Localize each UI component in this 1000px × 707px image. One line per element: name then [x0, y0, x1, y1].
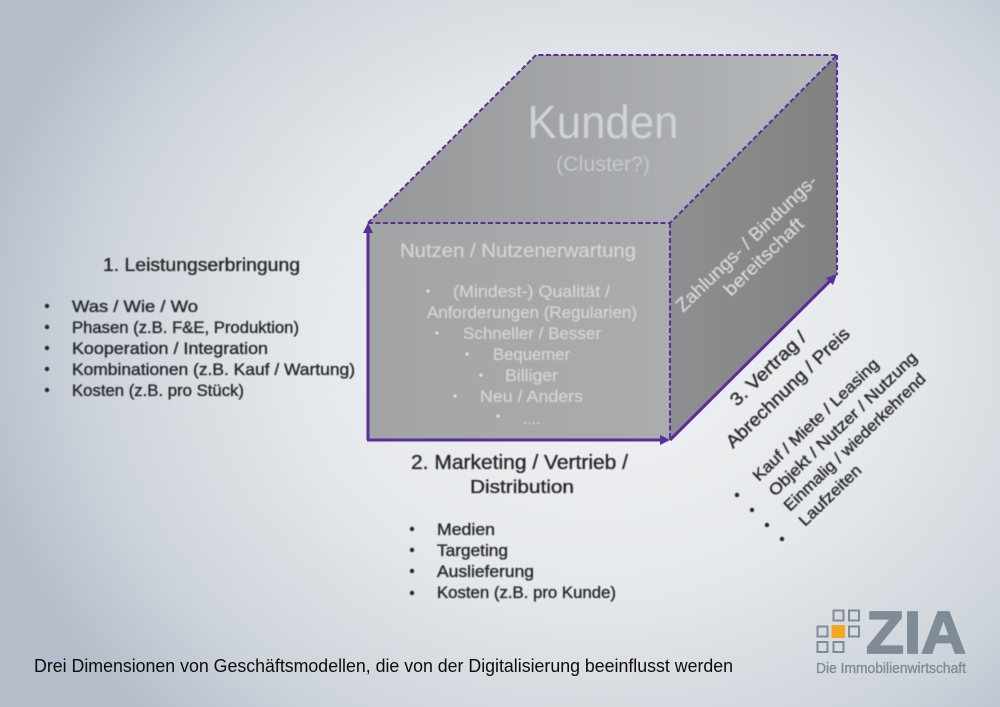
heading 3: Abrechnung / Preis	[722, 324, 854, 452]
list 1: Kooperation / Integration	[72, 340, 268, 358]
cube top face: Kunden	[368, 55, 837, 223]
logo: ZIA	[816, 600, 966, 677]
list 2: Targeting	[437, 542, 508, 560]
list 2: Medien	[437, 521, 495, 539]
cube diagram	[363, 55, 837, 445]
logo tagline: Die Immobilienwirtschaft	[816, 661, 966, 677]
list 3: Kauf / Miete / Leasing	[750, 356, 883, 485]
arrow: Marketing axis	[367, 435, 670, 445]
caption: Drei Dimensionen von Geschäftsmodellen, die von der Digitalisierung beeinflusst werden	[34, 656, 733, 676]
section 3: Vertrag	[722, 324, 929, 541]
cube top face: Kunden: Kunden	[528, 96, 678, 148]
heading 2: 2. Marketing / Vertrieb /	[411, 452, 628, 474]
cube front face: Nutzen: Bequemer	[493, 345, 570, 364]
list 3: Objekt / Nutzer / Nutzung	[766, 349, 921, 500]
list 1: Kombinationen (z.B. Kauf / Wartung)	[72, 361, 355, 379]
logo wordmark: ZIA	[866, 600, 966, 666]
heading 2: Distribution	[470, 476, 574, 497]
list 3	[735, 349, 929, 541]
heading 1: 1. Leistungserbringung	[103, 255, 300, 275]
cube side face: Zahlungsbereitschaft	[670, 55, 837, 440]
cube front face: Nutzen: Anforderungen (Regularien)	[427, 303, 637, 322]
arrow: Leistungserbringung axis	[363, 223, 373, 440]
cube side face: Zahlungsbereitschaft: Zahlungs- / Bindungs-	[671, 170, 821, 316]
dashed purple cube edges	[368, 55, 837, 440]
list 1: Kosten (z.B. pro Stück)	[72, 382, 244, 400]
list 2	[410, 521, 616, 602]
list 2: Kosten (z.B. pro Kunde)	[437, 584, 616, 602]
cube front face: Nutzen: Neu / Anders	[480, 387, 583, 406]
cube front face: Nutzen: Nutzen / Nutzenerwartung	[400, 241, 636, 262]
list 3: Einmalig / wiederkehrend	[781, 371, 929, 515]
section 1: Leistungserbringung	[45, 255, 355, 400]
heading 2	[411, 452, 628, 497]
arrow: Vertrag axis	[670, 274, 837, 440]
cube front face: Nutzen: ....	[523, 411, 540, 427]
cube front face: Nutzen: (Mindest-) Qualität /	[453, 282, 610, 301]
cube front face: Nutzen: Billiger	[505, 366, 558, 385]
list 1: Was / Wie / Wo	[72, 298, 198, 316]
list 1	[45, 298, 355, 400]
logo icon: squares	[818, 610, 859, 652]
cube front face: Nutzen	[368, 223, 670, 440]
heading 3: 3. Vertrag /	[726, 327, 810, 410]
list 2: Auslieferung	[437, 563, 534, 581]
list 1: Phasen (z.B. F&E, Produktion)	[72, 319, 299, 337]
cube front face: Nutzen: Schneller / Besser	[463, 324, 601, 343]
cube top face: Kunden: (Cluster?)	[556, 153, 650, 176]
cube side face: Zahlungsbereitschaft: bereitschaft	[719, 213, 808, 300]
list 3: Laufzeiten	[796, 462, 865, 530]
section 2: Marketing	[410, 452, 628, 602]
